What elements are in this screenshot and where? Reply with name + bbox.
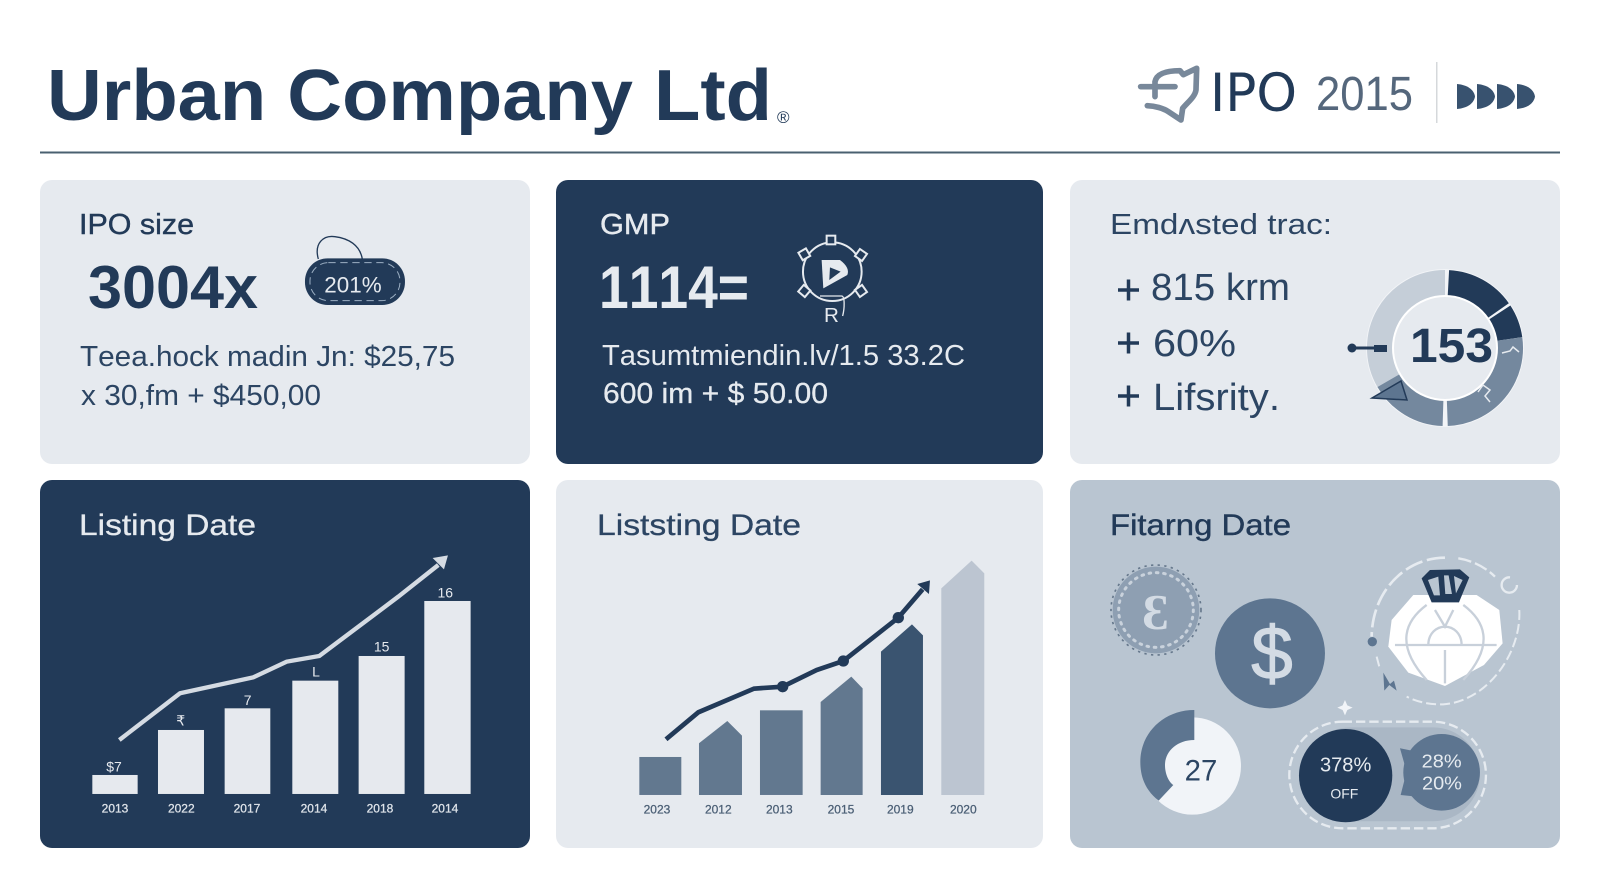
IPO label: IPO [1210, 63, 1297, 124]
discount badge [1299, 729, 1392, 822]
secondary badge: 28% [1422, 751, 1462, 772]
secondary badge [1400, 734, 1480, 811]
badge: 201% [324, 272, 382, 297]
bar chart [639, 561, 984, 816]
year labels: 2013 [102, 802, 129, 816]
panel: listing date bars [40, 480, 530, 848]
header rule [40, 152, 1560, 154]
panel: listing date trend [556, 480, 1043, 848]
year labels: 2014 [301, 802, 328, 816]
list [1118, 267, 1290, 419]
description [602, 340, 965, 410]
icon: gear [798, 236, 867, 327]
big number: 3004x [88, 254, 258, 321]
year labels [644, 802, 977, 816]
year labels: 2022 [168, 802, 195, 816]
year labels: 2015 [828, 802, 855, 816]
heading: IPO size [79, 209, 194, 241]
secondary badge: 20% [1422, 773, 1462, 794]
panel: filing date [1070, 480, 1560, 848]
icon: sparkle [1337, 700, 1353, 715]
registered mark: ® [777, 108, 790, 127]
icon: globe with crown [1368, 558, 1519, 704]
list: Lifsrity. [1153, 377, 1280, 419]
icon: arrow chevrons [1457, 84, 1535, 109]
year labels: 2014 [432, 802, 459, 816]
divider [1436, 62, 1438, 123]
title: Urban Company Ltd [47, 56, 772, 136]
year labels: 2013 [766, 802, 793, 816]
list: 60% [1153, 323, 1236, 365]
bar chart [92, 555, 471, 816]
discount badge: OFF [1330, 785, 1358, 801]
icon: dollar coin: $ [1251, 611, 1293, 695]
value labels [106, 585, 453, 775]
description: Teea.hock madin Jn: $25,75 [80, 341, 455, 373]
badge [305, 236, 405, 305]
heading: Emdʌsted trac: [1110, 209, 1332, 241]
year labels: 2018 [367, 802, 394, 816]
heading: Listing Date [79, 509, 256, 542]
year labels: 2023 [644, 802, 671, 816]
heading: Fitarng Date [1110, 509, 1291, 542]
donut: 27: 27 [1185, 755, 1217, 788]
year labels: 2017 [234, 802, 261, 816]
year labels: 2012 [705, 802, 732, 816]
description: Tasumtmiendin.lv/1.5 33.2C [602, 340, 965, 372]
description [80, 341, 455, 412]
list: 815 krm [1151, 267, 1290, 309]
description: 600 im + $ 50.00 [603, 378, 828, 410]
value labels: 7 [244, 692, 252, 708]
donut chart [1348, 269, 1524, 427]
year labels: 2019 [887, 802, 914, 816]
year labels [102, 802, 459, 816]
icon: coin: Ɛ [1142, 583, 1169, 639]
tick marks [1478, 347, 1519, 402]
trend arrow [119, 555, 448, 740]
big number: 1114= [599, 254, 749, 321]
wedge marker [1372, 381, 1407, 400]
heading: GMP [600, 209, 670, 241]
icon: logo mark [1141, 68, 1197, 120]
panel: estimated traction [1070, 180, 1560, 464]
discount pill [1289, 722, 1486, 828]
value labels: 16 [438, 585, 453, 601]
year label: 2015 [1316, 68, 1413, 121]
icon: dollar coin [1215, 598, 1325, 708]
discount badge: 378% [1320, 754, 1371, 777]
panel: GMP [556, 180, 1043, 464]
value labels: 15 [374, 639, 390, 655]
connector [1352, 346, 1377, 350]
donut value: 153 [1410, 320, 1493, 373]
value labels: ₹ [176, 713, 185, 729]
year labels: 2020 [950, 802, 977, 816]
value labels: L [312, 664, 320, 680]
header [40, 56, 1560, 154]
donut: 27 [1140, 710, 1241, 815]
icon: coin [1111, 565, 1201, 655]
panel: IPO size [40, 180, 530, 464]
value labels: $7 [106, 759, 122, 775]
icon: gear: R [824, 304, 839, 327]
description: x 30,fm + $450,00 [81, 380, 321, 412]
heading: Liststing Date [597, 509, 801, 542]
trend arrow [666, 580, 930, 739]
